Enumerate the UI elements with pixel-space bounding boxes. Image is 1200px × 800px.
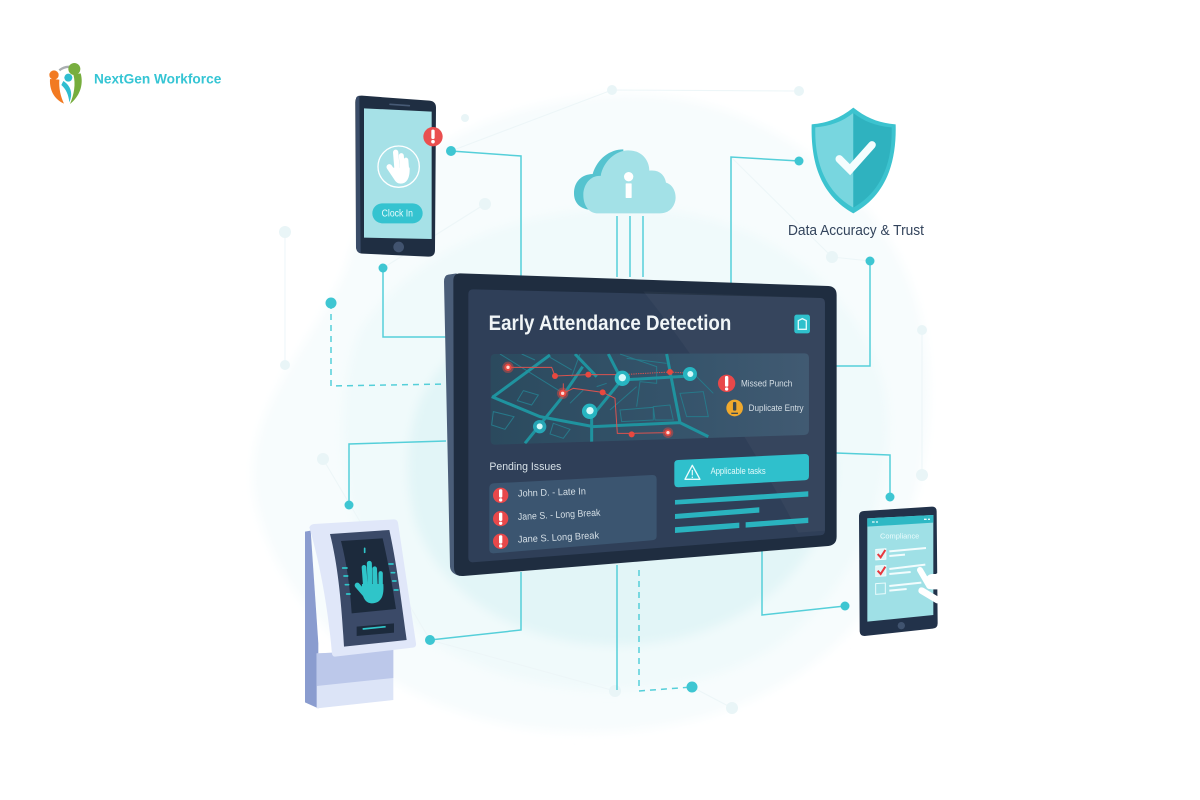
map red stops bbox=[502, 362, 673, 438]
main monitor bbox=[444, 273, 837, 576]
map panel bbox=[491, 353, 809, 445]
logo icon bbox=[49, 63, 82, 104]
clock in button: Clock In bbox=[382, 208, 413, 219]
shield label: Data Accuracy & Trust bbox=[788, 223, 924, 239]
map minor streets bbox=[492, 354, 713, 438]
connector lines bbox=[326, 146, 894, 692]
infographic canvas bbox=[49, 63, 938, 714]
duplicate entry alert: Duplicate Entry bbox=[749, 403, 804, 413]
pending issues list: Jane S. - Long Break bbox=[518, 508, 601, 523]
pending issues list bbox=[489, 475, 657, 553]
phone screen bbox=[364, 108, 432, 239]
tablet screen bbox=[867, 515, 933, 622]
phone body bbox=[355, 96, 436, 257]
monitor body bbox=[444, 273, 837, 576]
screen glare bbox=[643, 291, 825, 533]
map teal pins bbox=[533, 367, 697, 433]
tablet body bbox=[859, 507, 938, 636]
clock in button bbox=[372, 203, 423, 223]
task progress bars bbox=[675, 491, 808, 533]
hand scan icon bbox=[343, 548, 398, 603]
alert badge bbox=[423, 127, 443, 146]
hand icon in circle bbox=[378, 146, 419, 187]
kiosk side bbox=[305, 531, 318, 708]
cloud icon bbox=[574, 149, 676, 213]
kiosk head bbox=[309, 519, 416, 657]
missed punch alert bbox=[718, 375, 792, 392]
kiosk pedestal bbox=[317, 650, 393, 708]
shield icon bbox=[812, 108, 896, 213]
tablet header bbox=[867, 515, 933, 527]
tablet heading: Compliance bbox=[880, 532, 919, 541]
compliance tablet bbox=[859, 507, 950, 636]
dashboard title: Early Attendance Detection bbox=[489, 312, 731, 335]
map route lines bbox=[508, 367, 690, 433]
logo bbox=[49, 63, 222, 104]
pending issues list: Jane S. Long Break bbox=[518, 530, 600, 546]
cloud shadow side bbox=[574, 149, 623, 210]
pointing hand bbox=[920, 570, 950, 600]
card slot bbox=[357, 623, 394, 636]
fingerprint kiosk bbox=[305, 519, 416, 708]
status icon bbox=[794, 315, 810, 333]
phone device bbox=[355, 96, 443, 257]
brand name: NextGen Workforce bbox=[94, 71, 222, 87]
tablet home button bbox=[898, 622, 905, 629]
pending issues heading: Pending Issues bbox=[489, 461, 562, 473]
cloud body bbox=[583, 150, 676, 213]
info symbol bbox=[624, 172, 633, 198]
check mark bbox=[839, 145, 872, 170]
pending issues list: John D. - Late In bbox=[518, 486, 586, 500]
faint network lines bbox=[279, 85, 928, 714]
checklist bbox=[876, 548, 926, 594]
home button bbox=[393, 242, 404, 252]
missed punch alert: Missed Punch bbox=[741, 378, 792, 388]
kiosk screen bbox=[330, 530, 407, 647]
applicable tasks banner bbox=[674, 454, 809, 487]
applicable tasks banner: Applicable tasks bbox=[711, 466, 766, 476]
monitor screen bbox=[468, 289, 825, 562]
duplicate entry alert bbox=[726, 400, 804, 416]
map main roads bbox=[492, 354, 708, 443]
